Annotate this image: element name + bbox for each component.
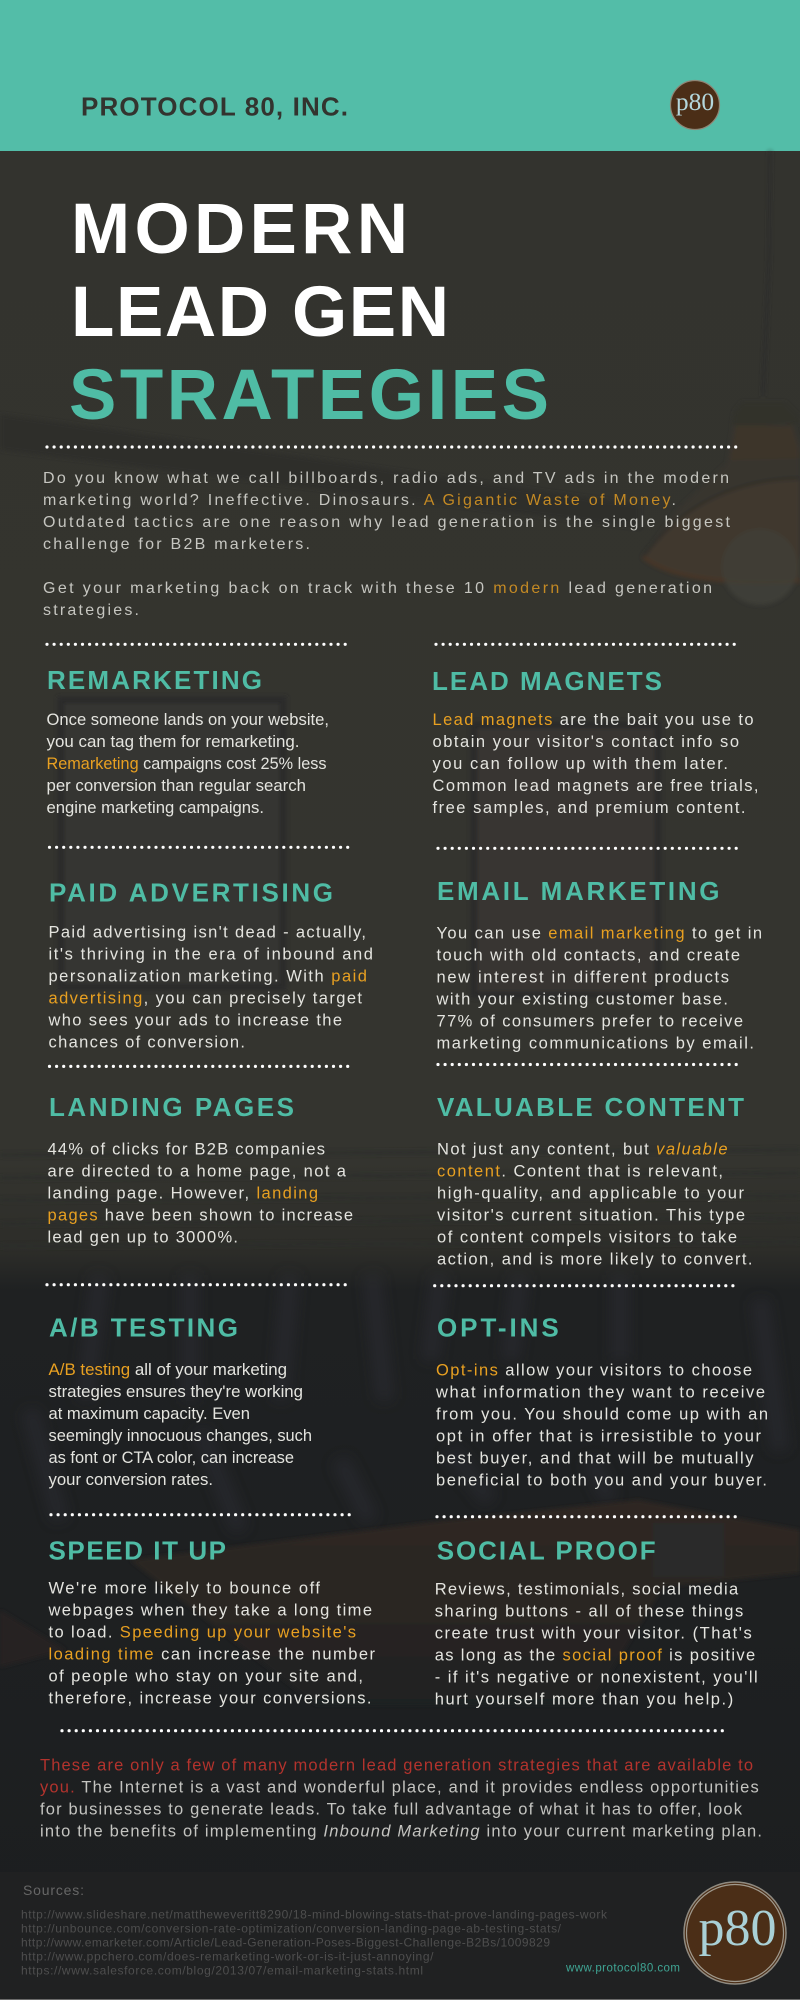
panel: lead magnets: free samples, and premium content.: [432, 799, 746, 817]
panel: email marketing: EMAIL MARKETING: [437, 876, 720, 906]
logo: p80 large: p80: [698, 1900, 776, 1957]
panel: speed it up: loading time can increase the number: [48, 1646, 376, 1664]
intro text: strategies.: [43, 602, 139, 619]
intro text: Outdated tactics are one reason why lead generation is the single biggest: [43, 514, 731, 531]
title: LEAD GEN: [71, 273, 449, 352]
panel: a/b testing: your conversion rates.: [48, 1471, 213, 1489]
panel: opt-ins: what information they want to receive: [435, 1384, 765, 1402]
closing text: These are only a few of many modern lead generation strategies that are available to: [40, 1757, 753, 1775]
panel: a/b testing: at maximum capacity. Even: [48, 1405, 250, 1423]
panel: email marketing: [436, 876, 762, 1052]
panel: opt-ins: from you. You should come up with an: [436, 1406, 768, 1424]
panel: landing pages: landing page. However, landing: [48, 1184, 318, 1202]
panel: remarketing: [46, 665, 329, 817]
panel: opt-ins: beneficial to both you and your buyer.: [436, 1472, 767, 1490]
panel: social proof: SOCIAL PROOF: [437, 1535, 656, 1565]
panel: social proof: as long as the social proof is positive: [435, 1647, 755, 1665]
intro text: marketing world? Ineffective. Dinosaurs. A Gigantic Waste of Money.: [43, 492, 676, 509]
panel: social proof: - if it's negative or nonexistent, you'll: [435, 1669, 758, 1687]
panel: email marketing: You can use email marketing to get in: [436, 924, 762, 942]
panel: landing pages: 44% of clicks for B2B companies: [48, 1140, 325, 1158]
panel: social proof: create trust with your visitor. (That's: [435, 1625, 752, 1643]
panel: social proof: sharing buttons - all of these things: [435, 1603, 743, 1621]
panel: remarketing: Once someone lands on your website,: [46, 711, 329, 729]
panel: valuable content: action, and is more likely to convert.: [437, 1250, 752, 1268]
panel: remarketing: Remarketing campaigns cost 25% less: [46, 755, 326, 773]
panel: email marketing: touch with old contacts, and create: [436, 946, 740, 964]
panel: valuable content: high-quality, and applicable to your: [437, 1184, 744, 1202]
panel: paid advertising: chances of conversion.: [48, 1033, 245, 1051]
sources: http://www.emarketer.com/Article/Lead-Generation-Poses-Biggest-Challenge-B2Bs/1009829: [21, 1935, 550, 1949]
panel: landing pages: pages have been shown to increase: [48, 1206, 353, 1224]
sources: https://www.salesforce.com/blog/2013/07/email-marketing-stats.html: [21, 1963, 423, 1977]
panel: opt-ins: [435, 1313, 768, 1490]
panel: landing pages: LANDING PAGES: [49, 1092, 294, 1122]
panel: landing pages: [48, 1092, 353, 1246]
panel: a/b testing: A/B testing all of your marketing: [48, 1361, 287, 1379]
sources: [21, 1882, 608, 1977]
panel: speed it up: SPEED IT UP: [48, 1535, 226, 1565]
intro text: [43, 470, 731, 619]
logo: p80 small: p80: [676, 87, 714, 116]
panel: opt-ins: OPT-INS: [437, 1313, 559, 1343]
panel: social proof: [435, 1535, 758, 1709]
panel: social proof: hurt yourself more than you help.): [435, 1691, 733, 1709]
panel: a/b testing: A/B TESTING: [49, 1313, 238, 1343]
sources: http://unbounce.com/conversion-rate-optimization/conversion-landing-page-ab-testing-stats/: [21, 1921, 562, 1935]
panel: speed it up: We're more likely to bounce off: [48, 1580, 320, 1598]
panel: opt-ins: best buyer, and that will be mutually: [436, 1450, 754, 1468]
closing text: into the benefits of implementing Inbound Marketing into your current marketing plan.: [40, 1823, 762, 1841]
hanging lamp photo element: [643, 151, 800, 605]
sources: Sources:: [23, 1882, 84, 1898]
panel: email marketing: with your existing customer base.: [436, 990, 728, 1008]
panel: valuable content: content. Content that is relevant,: [437, 1162, 723, 1180]
panel: lead magnets: you can follow up with them later.: [432, 755, 728, 773]
panel: social proof: Reviews, testimonials, social media: [435, 1581, 739, 1599]
title: [69, 190, 549, 435]
panel: email marketing: marketing communications by email.: [436, 1034, 754, 1052]
panel: speed it up: of people who stay on your site and,: [48, 1668, 363, 1686]
panel: landing pages: lead gen up to 3000%.: [48, 1228, 238, 1246]
logo: p80 large: [684, 1882, 786, 1984]
panel: lead magnets: obtain your visitor's contact info so: [432, 733, 739, 751]
panel: email marketing: 77% of consumers prefer to receive: [436, 1012, 743, 1030]
website url: www.protocol80.com: [565, 1963, 680, 1975]
panel: a/b testing: seemingly innocuous changes, such: [48, 1427, 312, 1445]
panel: remarketing: per conversion than regular search: [46, 777, 306, 795]
company name: PROTOCOL 80, INC.: [81, 92, 348, 122]
panel: landing pages: are directed to a home page, not a: [48, 1162, 347, 1180]
panel: lead magnets: LEAD MAGNETS: [432, 666, 662, 696]
closing text: for businesses to generate leads. To take full advantage of what it has to offer, look: [40, 1801, 743, 1819]
panel: speed it up: therefore, increase your conversions.: [48, 1690, 372, 1708]
panel: opt-ins: Opt-ins allow your visitors to choose: [436, 1362, 752, 1380]
panel: paid advertising: personalization marketing. With paid: [48, 967, 367, 985]
panel: lead magnets: [432, 666, 758, 817]
panel: speed it up: webpages when they take a long time: [48, 1602, 372, 1620]
panel: a/b testing: as font or CTA color, can increase: [48, 1449, 294, 1467]
panel: email marketing: new interest in different products: [436, 968, 729, 986]
panel: opt-ins: opt in offer that is irresistible to your: [436, 1428, 762, 1446]
sources: http://www.slideshare.net/mattheweveritt8290/18-mind-blowing-stats-that-prove-landing-pages-work: [21, 1907, 608, 1921]
closing text: [40, 1757, 762, 1841]
closing text: you. The Internet is a vast and wonderful place, and it provides endless opportunities: [40, 1779, 759, 1797]
panel: valuable content: Not just any content, but valuable: [437, 1140, 728, 1158]
panel: lead magnets: Common lead magnets are free trials,: [432, 777, 758, 795]
intro text: Do you know what we call billboards, radio ads, and TV ads in the modern: [43, 470, 729, 487]
panel: a/b testing: [48, 1313, 312, 1489]
panel: valuable content: of content compels visitors to take: [437, 1228, 737, 1246]
panel: speed it up: to load. Speeding up your website's: [48, 1624, 356, 1642]
panel: paid advertising: Paid advertising isn't dead - actually,: [48, 923, 366, 941]
sources: http://www.ppchero.com/does-remarketing-work-or-is-it-just-annoying/: [21, 1949, 434, 1963]
panel: valuable content: VALUABLE CONTENT: [437, 1092, 744, 1122]
logo: p80 small: [670, 80, 720, 130]
panel: paid advertising: advertising, you can precisely target: [48, 989, 362, 1007]
panel: a/b testing: strategies ensures they're working: [48, 1383, 303, 1401]
title: MODERN: [71, 190, 408, 269]
panel: paid advertising: [48, 878, 373, 1051]
panel: remarketing: REMARKETING: [47, 665, 262, 695]
title: STRATEGIES: [69, 356, 549, 435]
panel: valuable content: visitor's current situation. This type: [437, 1206, 745, 1224]
header band: [0, 0, 800, 151]
panel: remarketing: you can tag them for remarketing.: [46, 733, 300, 751]
panel: paid advertising: it's thriving in the era of inbound and: [48, 945, 373, 963]
panel: speed it up: [48, 1535, 376, 1708]
panel: paid advertising: PAID ADVERTISING: [49, 878, 333, 908]
panel: lead magnets: Lead magnets are the bait you use to: [432, 711, 754, 729]
panel: paid advertising: who sees your ads to increase the: [48, 1011, 342, 1029]
intro text: challenge for B2B marketers.: [43, 536, 310, 553]
panel: valuable content: [437, 1092, 752, 1268]
panel: remarketing: engine marketing campaigns.: [46, 799, 264, 817]
intro text: Get your marketing back on track with these 10 modern lead generation: [43, 580, 712, 597]
